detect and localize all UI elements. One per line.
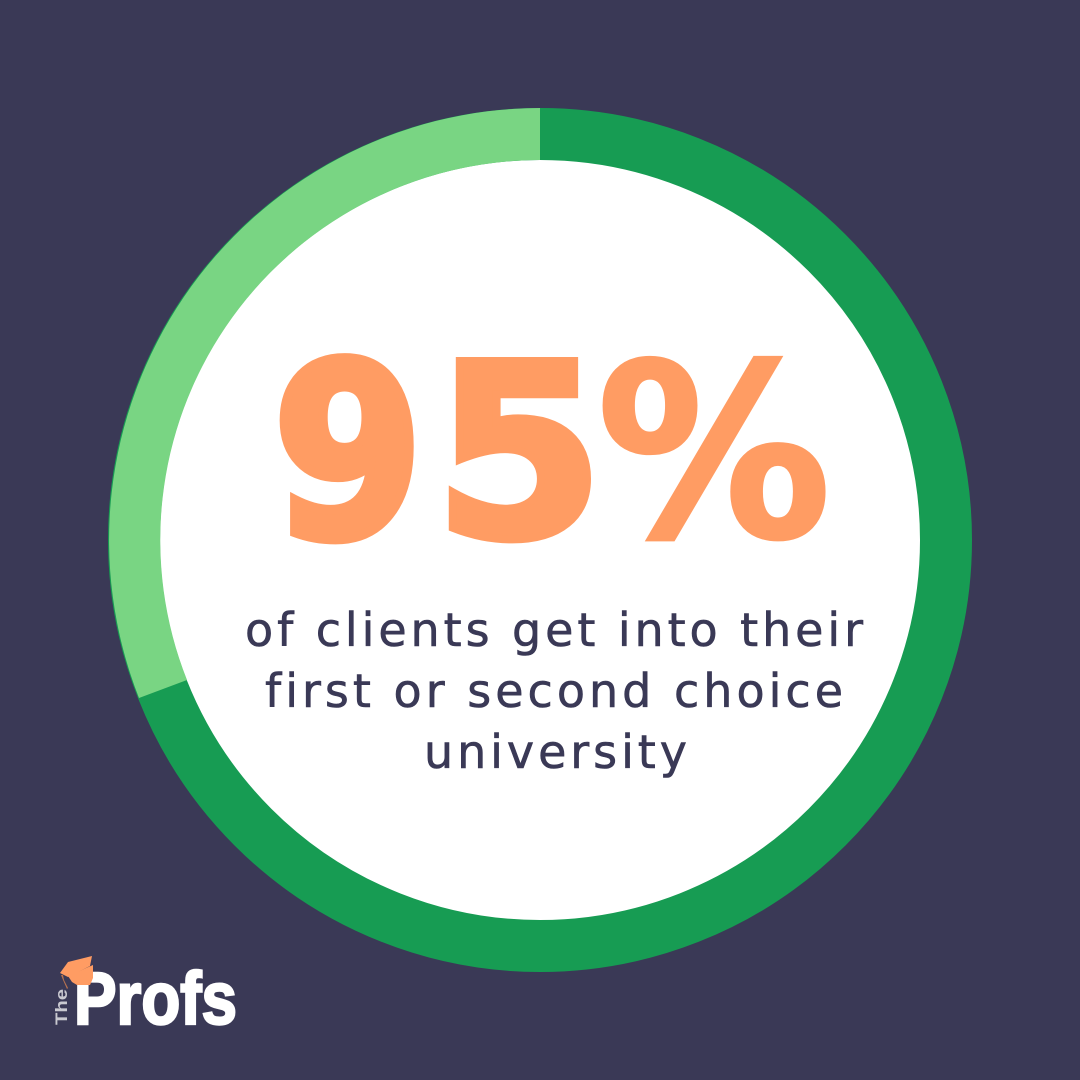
- logo word: The: The: [52, 989, 71, 1025]
- big statistic: 95%: [273, 313, 831, 593]
- donut chart: [109, 108, 946, 946]
- big statistic: 95%: 5: [434, 313, 604, 593]
- logo wordmark: Profs: Profs: [74, 957, 237, 1040]
- caption text: [245, 603, 863, 779]
- icon: graduation cap: [60, 956, 93, 989]
- logo: The Profs: [52, 956, 237, 1040]
- caption text: first or second choice: [265, 664, 843, 718]
- caption text: university: [424, 725, 687, 779]
- ring segment: light green: [109, 108, 540, 698]
- white inner circle: [159, 159, 921, 921]
- big statistic: 95%: %: [597, 313, 831, 593]
- ring segment: dark green majority: [134, 134, 946, 946]
- big statistic: 95%: 9: [273, 313, 423, 593]
- caption text: of clients get into their: [245, 603, 863, 657]
